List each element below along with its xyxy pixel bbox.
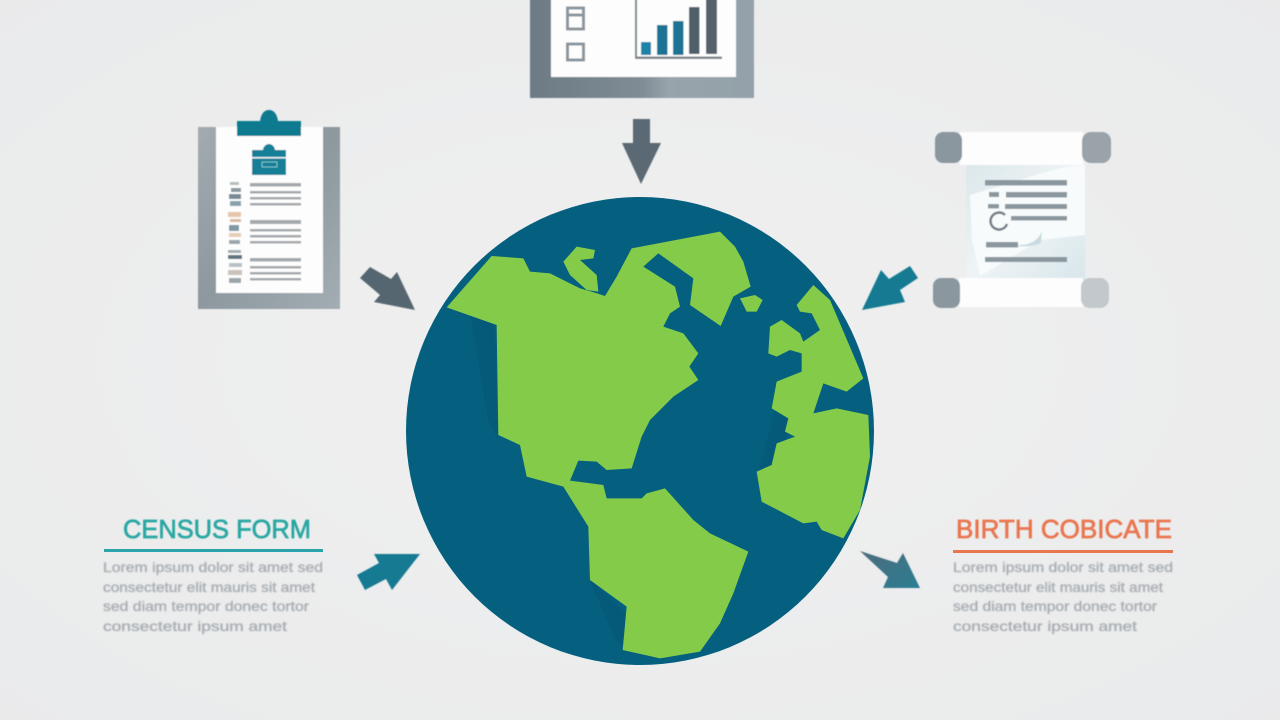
icon: scroll certificate xyxy=(933,132,1111,308)
scroll top band xyxy=(960,132,1083,165)
scroll corner caps xyxy=(933,132,1111,308)
small island xyxy=(740,295,763,312)
body text: sed diam tempor donec tortor xyxy=(103,598,309,614)
document frame xyxy=(530,0,754,98)
heading rule xyxy=(953,550,1173,553)
Europe and Africa xyxy=(757,285,870,538)
icon: survey document with bar chart xyxy=(530,0,754,98)
scroll body xyxy=(966,162,1085,280)
northern island xyxy=(563,247,598,292)
body text: sed diam tempor donec tortor xyxy=(953,598,1157,614)
body text: consectetur elit mauris sit amet xyxy=(953,579,1163,595)
scroll bottom band xyxy=(959,278,1083,307)
body text xyxy=(953,559,1173,634)
continents xyxy=(447,232,870,658)
body text: consectetur elit mauris sit amet xyxy=(103,579,315,595)
globe xyxy=(406,197,874,665)
form data column xyxy=(228,182,242,283)
body text: consectetur ipsum amet xyxy=(953,618,1137,634)
clipboard paper xyxy=(216,127,323,293)
body text: Lorem ipsum dolor sit amet sed xyxy=(953,559,1173,575)
continent shadows xyxy=(470,315,790,650)
icon: briefcase xyxy=(252,144,286,175)
clipboard board xyxy=(198,127,340,309)
arrow: census form to globe xyxy=(357,554,420,590)
certificate lines xyxy=(985,180,1067,262)
arrow: down to globe xyxy=(622,119,661,184)
document page xyxy=(551,0,736,77)
infographic canvas xyxy=(102,0,1173,665)
body text: Lorem ipsum dolor sit amet sed xyxy=(103,559,323,575)
heading: birth certificate: BIRTH COBICATE xyxy=(956,514,1172,544)
certificate seal xyxy=(991,213,1007,230)
clipboard clip xyxy=(237,110,301,136)
arrow: clipboard to globe xyxy=(360,267,415,310)
the Americas and Greenland xyxy=(447,232,751,658)
form lines xyxy=(250,183,301,280)
arrow: globe to birth certificate xyxy=(860,551,920,588)
body text: consectetur ipsum amet xyxy=(103,618,287,634)
checkboxes xyxy=(567,8,584,60)
bar chart xyxy=(635,0,722,59)
body text xyxy=(103,559,323,634)
panel: census form xyxy=(103,514,323,634)
globe ocean xyxy=(406,197,874,665)
scroll highlights xyxy=(970,165,1085,276)
panel: birth certificate xyxy=(953,514,1173,634)
icon: clipboard form xyxy=(198,110,340,309)
certificate signature xyxy=(1018,231,1042,246)
arrow: scroll to globe xyxy=(862,266,918,310)
heading rule xyxy=(104,549,323,552)
heading: census form: CENSUS FORM xyxy=(123,514,311,544)
